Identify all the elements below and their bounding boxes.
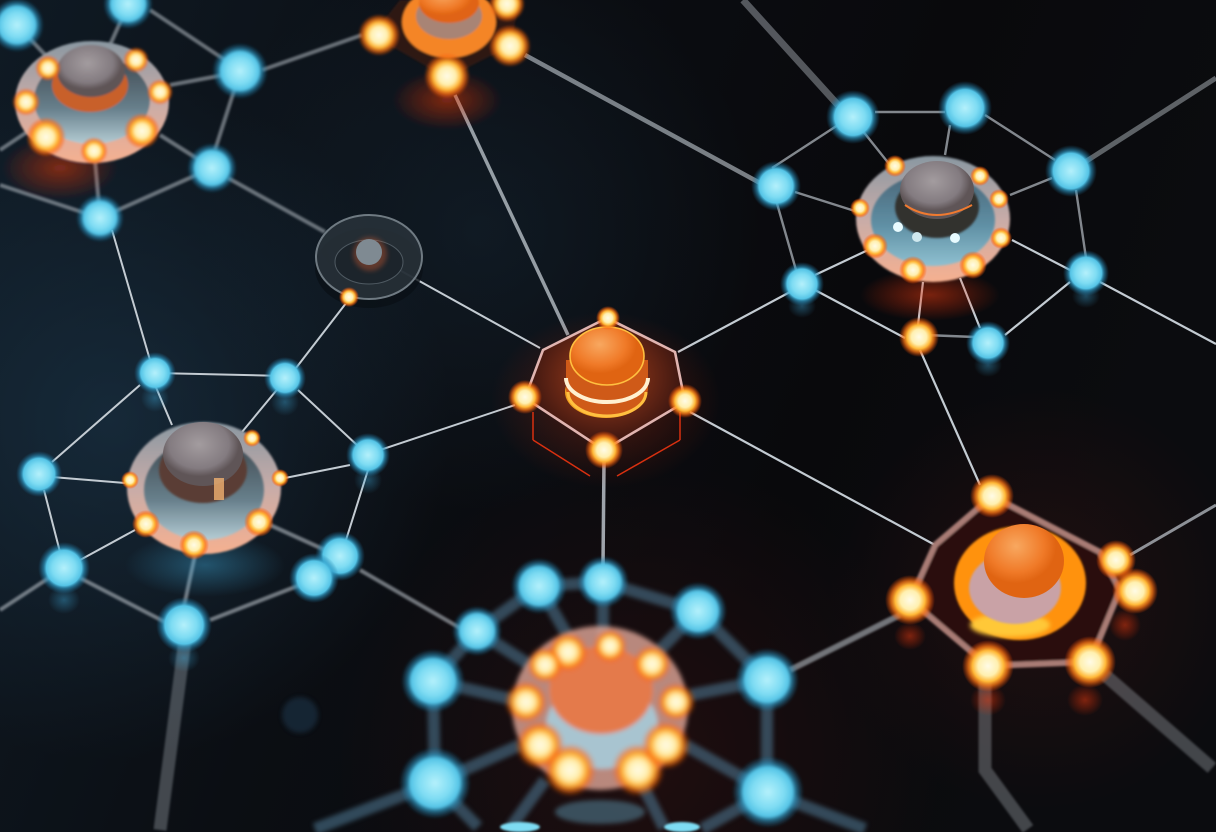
hub: lower-left glass	[121, 422, 289, 597]
blue nodes: lower-left	[16, 352, 390, 672]
hub: upper-right glass	[850, 155, 1012, 321]
hub: top-left glass	[2, 41, 173, 200]
blue nodes: upper-left	[0, 0, 268, 242]
connecting lines: mid-ground	[44, 0, 1216, 565]
hub: central orange	[491, 306, 721, 488]
blue nodes: upper-right	[751, 81, 1109, 377]
hub: lower-right orange	[885, 474, 1158, 716]
blue nodes: bottom	[399, 556, 804, 832]
hub: small dark glass disk	[315, 215, 423, 308]
hub: top orange	[358, 0, 531, 130]
connecting lines: bottom hub spokes	[315, 582, 865, 829]
hub: bottom glass, out of focus	[505, 626, 695, 824]
